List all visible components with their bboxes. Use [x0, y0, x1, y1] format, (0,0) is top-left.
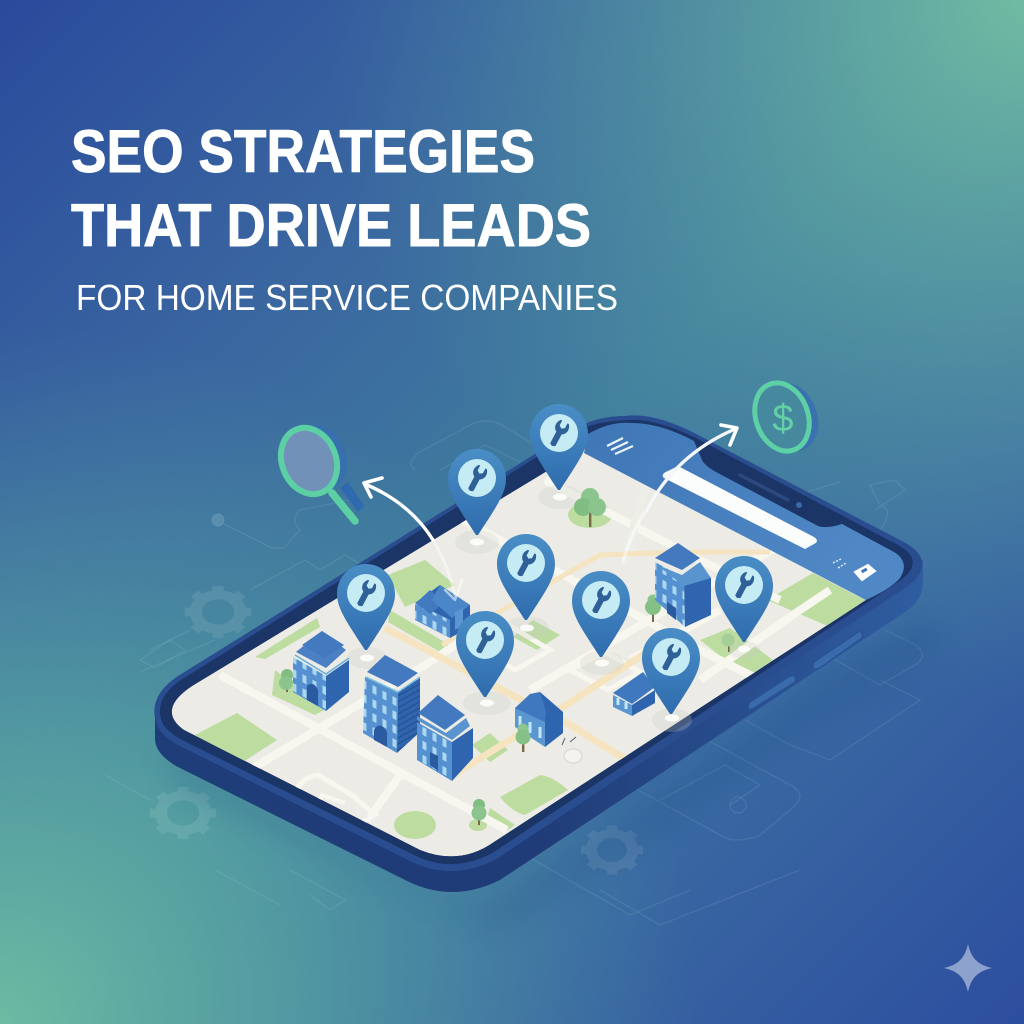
green parks — [195, 502, 865, 839]
tree: house lower — [516, 724, 530, 752]
tree: right building — [645, 594, 661, 622]
arrow: to magnifying glass — [364, 478, 462, 600]
tree: right park — [722, 634, 734, 652]
tree: upper map — [574, 488, 606, 527]
icon: dollar coin: $ — [772, 398, 794, 440]
icon: dollar coin — [746, 375, 827, 459]
screen map — [172, 445, 866, 856]
pin 7 — [715, 556, 773, 642]
phone — [154, 415, 923, 892]
phone body side — [155, 560, 923, 892]
title: THAT DRIVE LEADS — [71, 192, 591, 259]
building: left office — [293, 631, 349, 711]
pin 2 — [448, 449, 506, 535]
small grey landmark — [564, 749, 582, 763]
pin 5 — [530, 404, 588, 490]
pin shadows — [347, 485, 760, 732]
subtitle: FOR HOME SERVICE COMPANIES — [76, 277, 618, 318]
phone bezel — [160, 420, 913, 864]
tree: lower street — [472, 799, 486, 825]
building: house upper — [415, 585, 470, 638]
tree: left building — [279, 669, 293, 692]
title: SEO STRATEGIES — [71, 118, 535, 185]
pin 6 — [572, 571, 630, 657]
pin 3 — [456, 611, 514, 697]
phone frame — [154, 415, 922, 871]
header bar — [584, 423, 904, 600]
building: house lower — [515, 692, 563, 747]
status icons — [833, 559, 875, 580]
arrow: to dollar coin — [623, 425, 737, 562]
building: small garage — [613, 672, 655, 716]
pin 4 — [497, 534, 555, 620]
menu icon — [607, 438, 633, 454]
building: mid office — [417, 695, 473, 781]
icon: sparkle watermark — [944, 944, 992, 992]
pin 8 — [642, 628, 700, 714]
title — [71, 118, 591, 259]
building: right office — [655, 543, 711, 627]
icon: magnifying glass — [271, 416, 364, 521]
building: tall tower — [363, 655, 420, 753]
side buttons — [748, 632, 862, 709]
pin 1 — [337, 564, 395, 650]
phone shadow — [160, 610, 940, 930]
roads — [220, 470, 830, 832]
background circuit lines and gears — [105, 421, 922, 925]
tan paths — [385, 552, 770, 777]
search bar — [663, 466, 817, 549]
notch speaker and camera — [740, 475, 802, 508]
